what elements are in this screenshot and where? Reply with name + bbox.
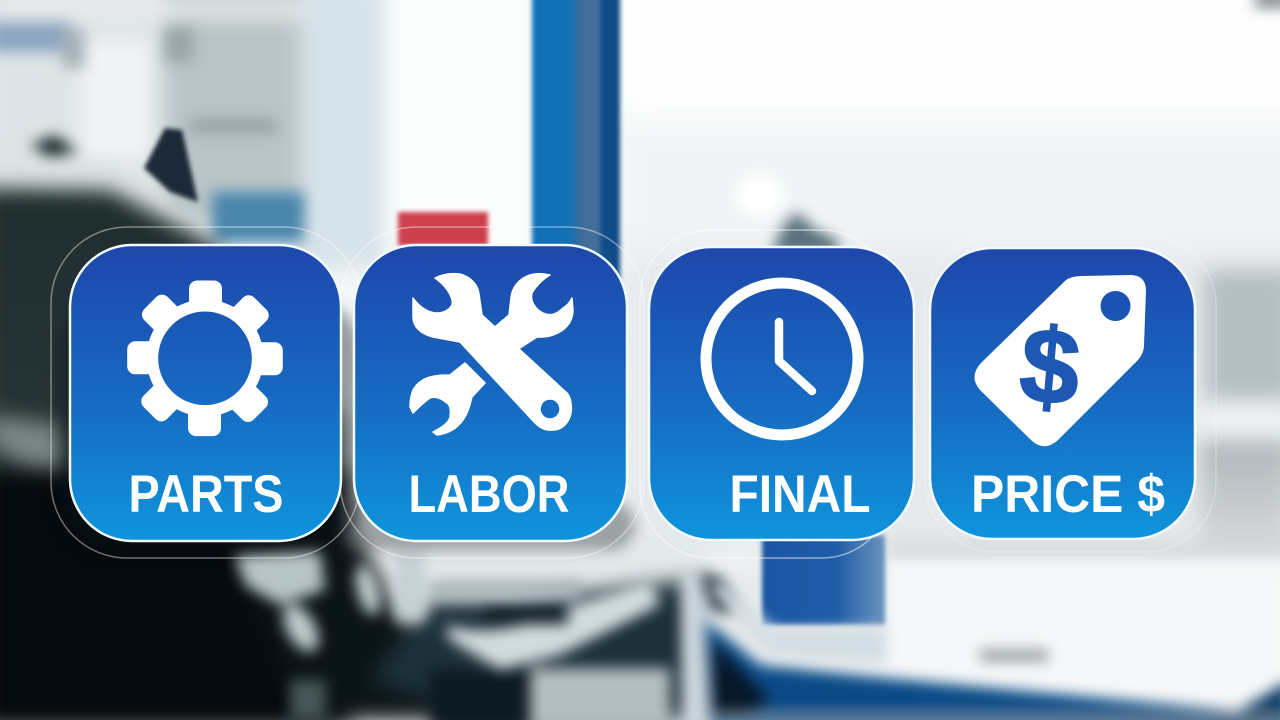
tile: price bbox=[930, 248, 1195, 539]
label: labor: LABOR bbox=[408, 465, 570, 524]
icon: gear bbox=[127, 280, 283, 436]
icon: clock bbox=[706, 283, 858, 435]
tile: labor bbox=[354, 245, 627, 541]
tile: final bbox=[649, 247, 914, 540]
label: final: FINAL bbox=[730, 465, 870, 524]
dollar sign: $ bbox=[1015, 306, 1085, 428]
tile: parts bbox=[70, 245, 341, 541]
label: price: PRICE $ bbox=[971, 465, 1165, 524]
label: parts: PARTS bbox=[128, 465, 284, 524]
icon: price tag bbox=[974, 275, 1146, 446]
glass outline rings bbox=[51, 227, 1216, 558]
icon: crossed wrenches bbox=[410, 274, 573, 435]
